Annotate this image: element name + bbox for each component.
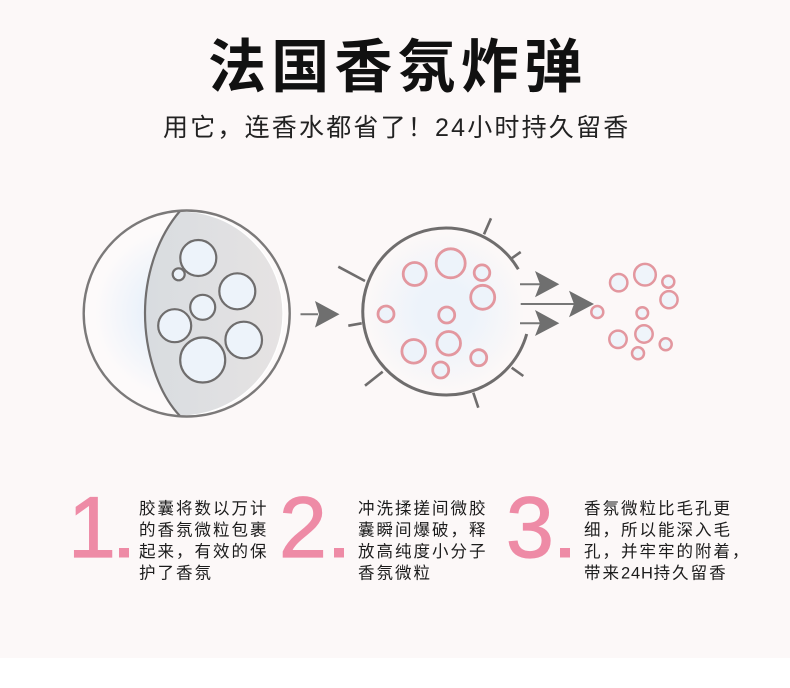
released particles (591, 264, 678, 359)
step 2 text: 香氛微粒 (358, 564, 432, 582)
arrow: capsule to burst (300, 301, 340, 328)
step 1 text (139, 499, 268, 582)
shell edge (145, 211, 180, 416)
sphere outline (84, 210, 290, 416)
step 1 text: 的香氛微粒包裹 (139, 520, 268, 540)
title: 法国香氛炸弹 (208, 35, 587, 100)
capsule sphere illustration (84, 210, 290, 416)
step 3 (506, 480, 750, 582)
burst spikes (338, 218, 523, 408)
step 2 text (358, 499, 488, 582)
burst outline (363, 228, 527, 395)
step 1 dot (119, 548, 129, 558)
step 3 dot (560, 548, 570, 558)
step 1 text: 护了香氛 (139, 564, 213, 582)
step 2 text: 放高纯度小分子 (358, 542, 488, 561)
subtitle: 用它，连香水都省了！24小时持久留香 (163, 114, 630, 142)
fragrance particles inside (378, 249, 495, 378)
step 3 text (584, 499, 750, 582)
step 3 text: 细，所以能深入毛 (584, 520, 732, 540)
inner shell (145, 211, 283, 416)
step 3 number: 3 (506, 480, 554, 576)
step 1 (68, 480, 268, 582)
bursting capsule illustration (338, 218, 527, 408)
step 3 text: 带来24H持久留香 (584, 564, 728, 582)
step 3 text: 孔，并牢牢的附着， (584, 542, 750, 561)
step 1 number: 1 (68, 480, 116, 576)
step 2 number: 2 (279, 480, 327, 576)
step 3 text: 香氛微粒比毛孔更 (584, 499, 732, 518)
step 1 text: 起来，有效的保 (139, 542, 268, 561)
step 2 dot (334, 548, 344, 558)
release arrows (520, 271, 594, 336)
step 1 text: 胶囊将数以万计 (139, 499, 268, 518)
step 2 (279, 480, 488, 582)
capsule bubbles (158, 240, 262, 382)
step 2 text: 囊瞬间爆破，释 (358, 520, 488, 540)
step 2 text: 冲洗揉搓间微胶 (358, 499, 488, 518)
